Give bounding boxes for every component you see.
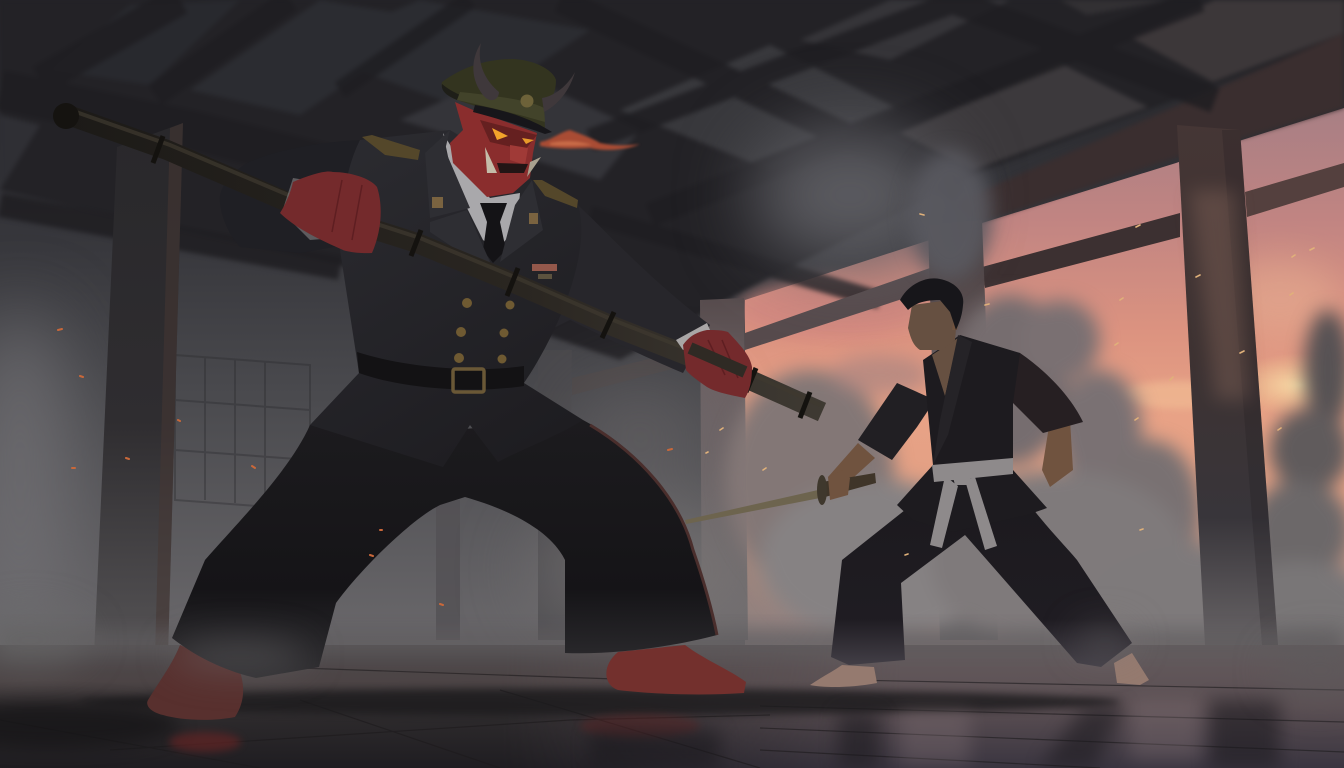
floor bbox=[0, 630, 1344, 768]
oni shirt and tie bbox=[443, 133, 520, 263]
oni gloved hands bbox=[280, 172, 752, 398]
fighter arms bbox=[828, 350, 1083, 487]
young martial artist bbox=[685, 278, 1149, 687]
oni military cap bbox=[442, 59, 556, 134]
main right pillar bbox=[1177, 125, 1278, 645]
oni buttons and medals bbox=[432, 197, 557, 364]
fighter belt bbox=[930, 458, 1013, 550]
oni officer bbox=[147, 43, 746, 720]
oni near arm bbox=[220, 140, 400, 253]
oni far arm bbox=[530, 205, 710, 373]
oni head bbox=[450, 102, 541, 197]
fighter chest bbox=[932, 338, 958, 396]
fighter trousers bbox=[831, 505, 1132, 667]
main left pillar bbox=[94, 123, 183, 655]
fighter feet bbox=[810, 653, 1149, 687]
fighter gi top bbox=[897, 335, 1047, 532]
fighter wooden sword bbox=[685, 470, 876, 524]
far pillars bbox=[436, 220, 998, 640]
foreground mist bbox=[0, 610, 1344, 700]
staff bbox=[53, 103, 822, 418]
smoke clouds at windows bbox=[725, 150, 1344, 660]
smoke behind figures bbox=[0, 125, 950, 650]
oni belt bbox=[357, 352, 524, 392]
embers bbox=[58, 214, 1314, 605]
oni horns bbox=[473, 43, 575, 112]
ceiling panels and rafters bbox=[0, 0, 1344, 360]
fire breath bbox=[540, 130, 640, 150]
oni jacket bbox=[310, 130, 583, 467]
oni trouser rim light bbox=[590, 425, 717, 635]
window mullions bbox=[572, 163, 1344, 395]
oni shoulder boards bbox=[362, 135, 578, 208]
oni trousers bbox=[172, 420, 717, 678]
sunset windows bbox=[740, 108, 1344, 650]
shoji back wall bbox=[175, 355, 310, 510]
oni feet bbox=[147, 645, 746, 720]
oni lapels bbox=[425, 130, 543, 268]
fighter collar bbox=[933, 335, 972, 465]
fighter head bbox=[900, 278, 963, 350]
